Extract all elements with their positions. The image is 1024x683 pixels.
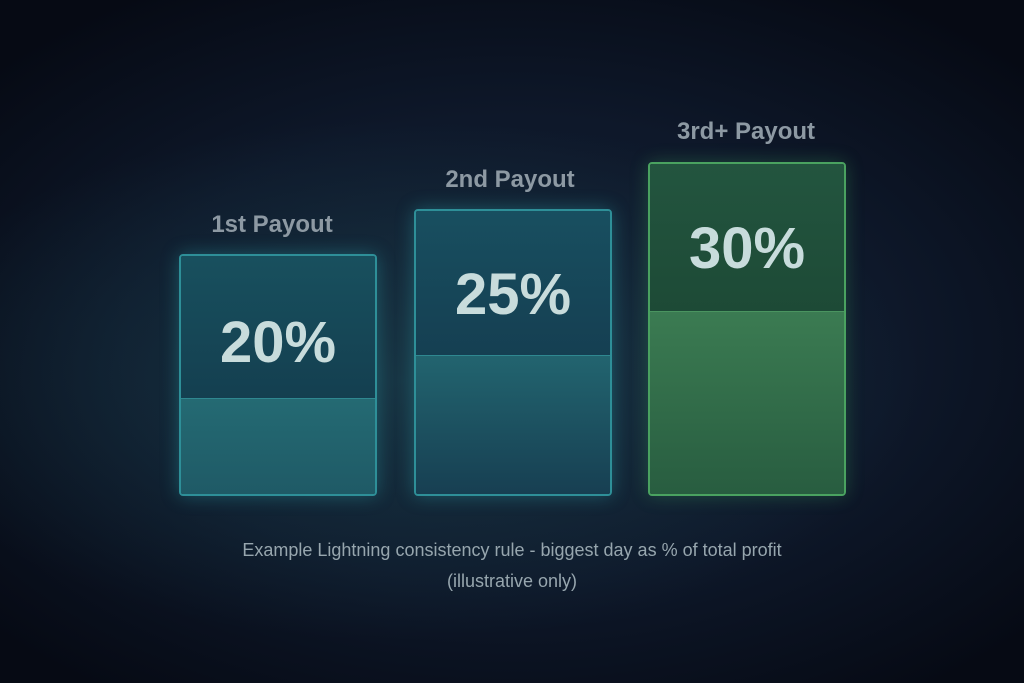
bar: 1st payout 20% xyxy=(179,254,377,496)
caption: Example Lightning consistency rule - biggest day as % of total profit xyxy=(242,540,782,560)
value: 20%: 20% xyxy=(220,310,336,375)
label: 3rd+ payout: 3rd+ Payout xyxy=(677,118,815,145)
value: 30%: 30% xyxy=(689,216,805,281)
caption note: (illustrative only) xyxy=(447,571,577,591)
bar: 2nd payout 25% xyxy=(414,209,612,496)
bar: 3rd+ payout 30% xyxy=(648,162,846,496)
value: 25%: 25% xyxy=(455,262,571,327)
label: 2nd payout: 2nd Payout xyxy=(445,166,575,193)
label: 1st payout: 1st Payout xyxy=(211,211,333,238)
